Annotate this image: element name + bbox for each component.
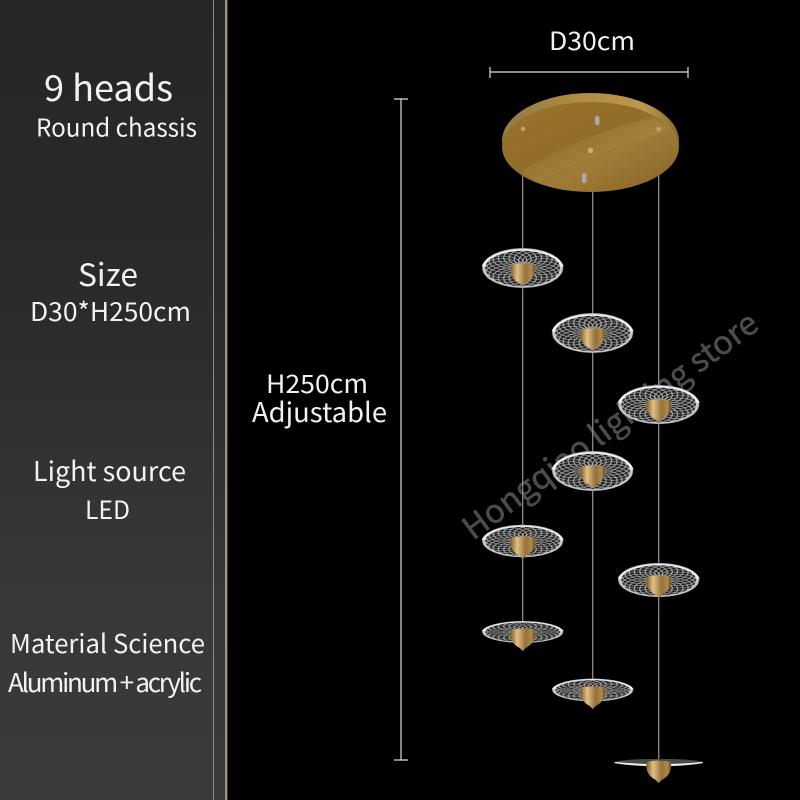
diameter dimension	[490, 22, 688, 78]
spec: material	[8, 624, 205, 700]
pendant 8	[549, 678, 637, 709]
watermark: Hongqiao lighting store	[452, 299, 767, 549]
pendant 7	[479, 620, 567, 651]
cords	[523, 129, 659, 760]
spec: light source: LED	[85, 491, 130, 527]
pendant 3	[615, 383, 703, 426]
pendant 5	[479, 523, 567, 559]
spec: size: D30*H250cm	[30, 292, 191, 329]
spec: light source	[33, 450, 186, 527]
spec: heads and chassis: Round chassis	[36, 110, 197, 144]
spec: material: Material Science	[10, 624, 205, 661]
height dimension	[252, 99, 408, 760]
pendant 6	[615, 561, 703, 599]
height dimension: H250cm	[266, 364, 368, 401]
panel: left specification sidebar	[0, 0, 227, 800]
pendant 2	[548, 311, 637, 355]
spec: light source: Light source	[33, 450, 186, 489]
spec: material: Aluminum + acrylic	[8, 663, 202, 700]
pendant 4	[548, 449, 637, 493]
ceiling plate	[502, 93, 679, 192]
pendant 1	[479, 246, 567, 290]
spec: heads and chassis: 9 heads	[44, 61, 173, 112]
spec: size: Size	[78, 250, 138, 295]
spec: heads and chassis	[36, 61, 197, 144]
spec: size	[30, 250, 191, 329]
height dimension: Adjustable	[252, 391, 387, 430]
pendant 9	[615, 759, 703, 783]
diameter dimension: D30cm	[549, 22, 635, 58]
